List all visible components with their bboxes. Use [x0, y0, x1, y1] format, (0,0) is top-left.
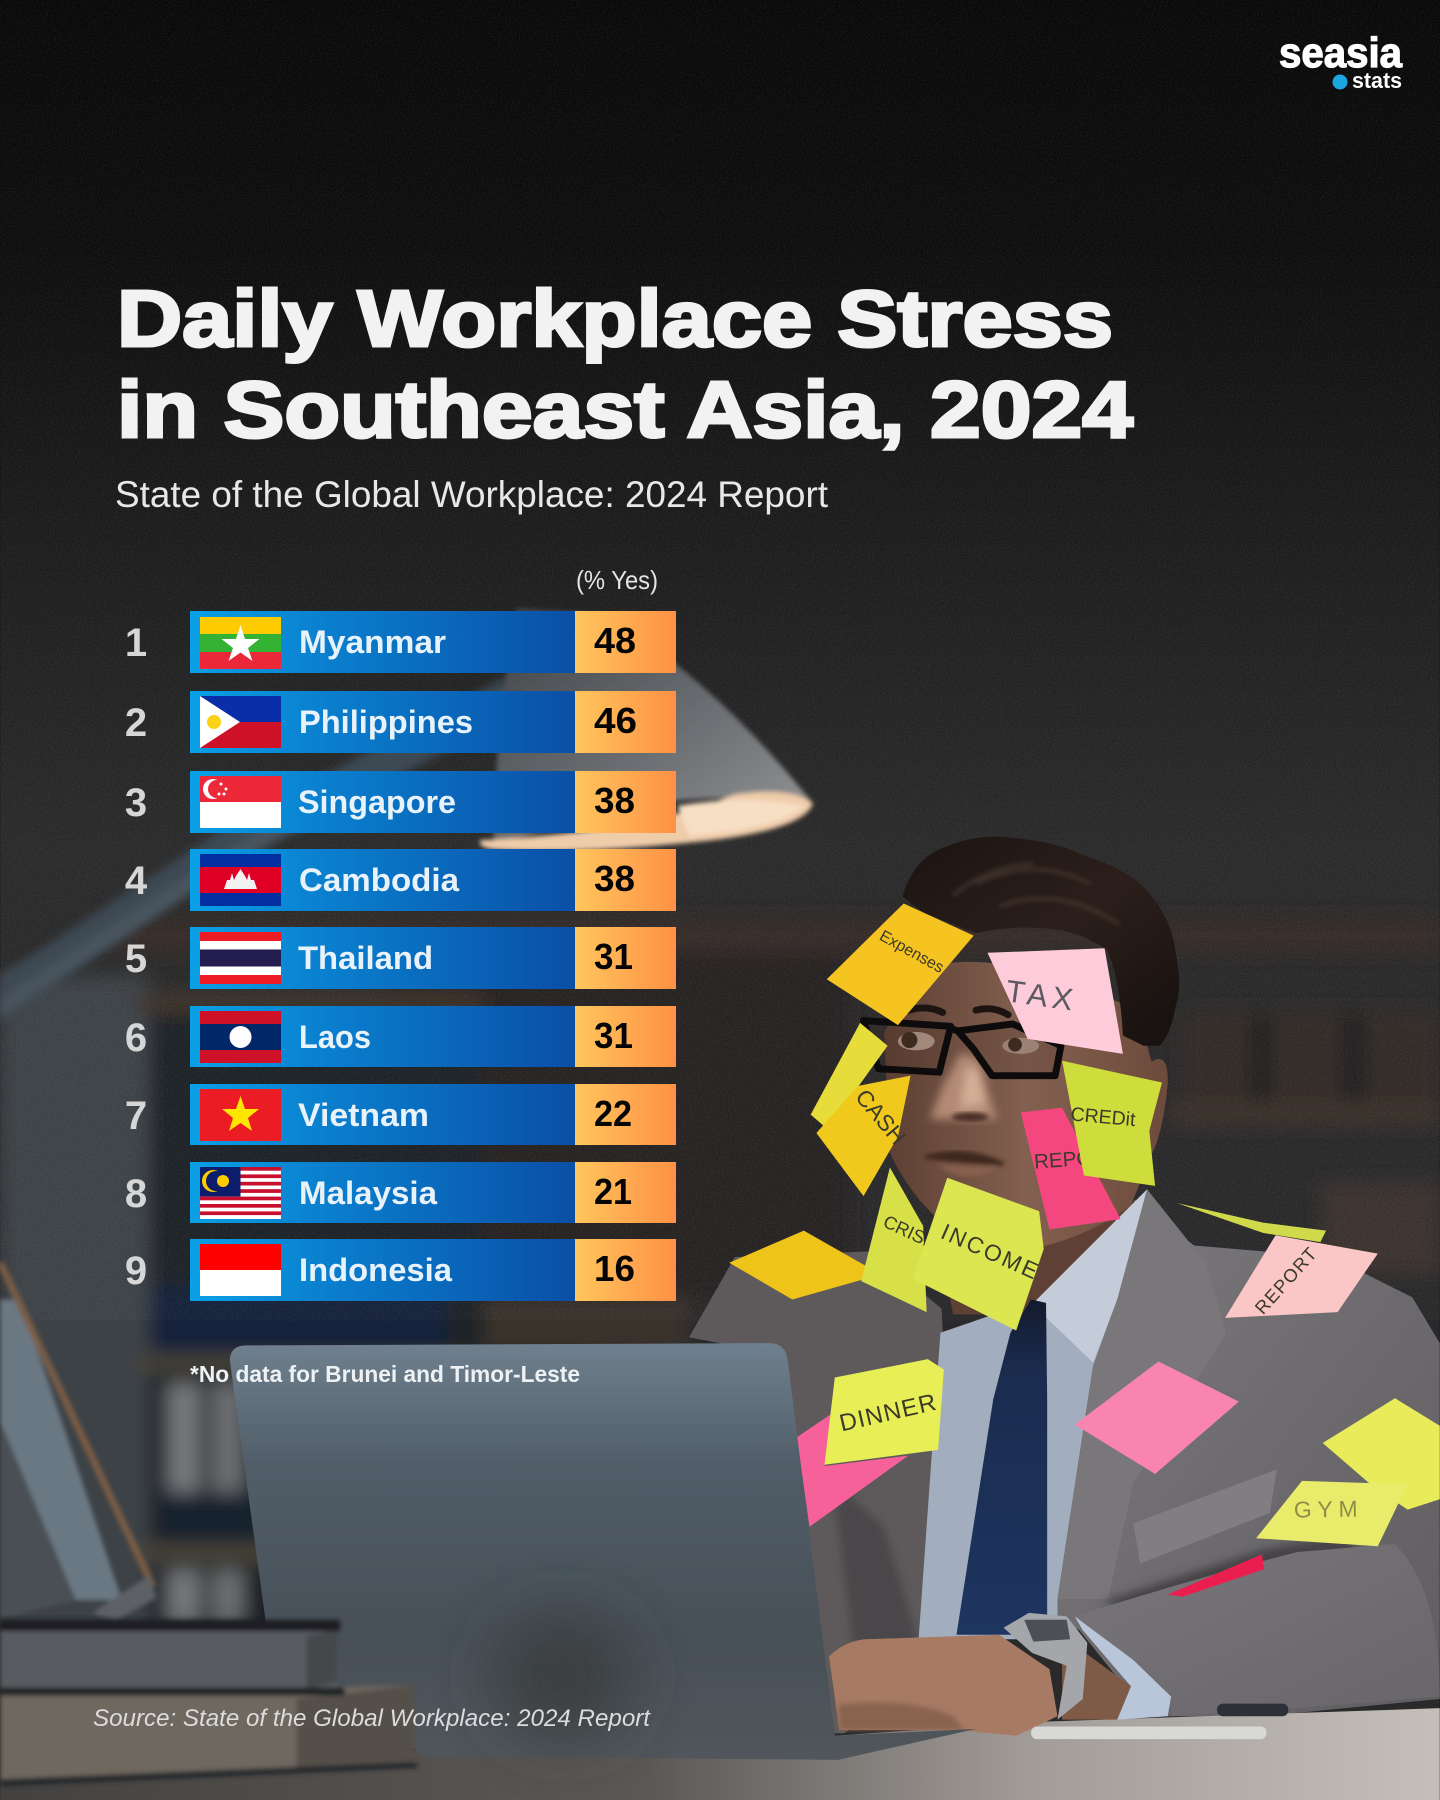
row 3: Singapore: 38 — [594, 780, 635, 821]
row 2: Philippines: 2 — [125, 701, 147, 745]
row 6: Laos: 31 — [594, 1015, 633, 1056]
flag: Malaysia — [200, 1167, 281, 1219]
man: eyebrows — [903, 1008, 1008, 1015]
row 7: Vietnam — [125, 1084, 676, 1145]
sticky note: report pink: REPO — [1033, 1147, 1093, 1174]
row 2: Philippines — [125, 691, 676, 753]
flag: Myanmar — [200, 617, 281, 669]
row 7: Vietnam: Vietnam — [298, 1097, 429, 1133]
flag: Indonesia — [200, 1244, 281, 1296]
man: jacket shadow — [832, 1481, 919, 1665]
source: Source: State of the Global Workplace: 2024 Report — [93, 1705, 651, 1732]
man: hair highlights — [953, 863, 1119, 924]
sticky note: dinner: DINNER — [837, 1389, 940, 1437]
sticky note: crisis: CRISIS — [880, 1211, 945, 1256]
row 3: Singapore: 3 — [125, 781, 147, 825]
row 5: Thailand: Thailand — [298, 940, 433, 976]
man: fingers shadow — [838, 1702, 965, 1730]
pen on desk — [1031, 1727, 1266, 1739]
man: nostrils — [952, 1112, 989, 1122]
man: head — [884, 962, 1168, 1254]
row 6: Laos — [125, 1006, 676, 1067]
row 6: Laos: Laos — [299, 1019, 371, 1055]
man: collar — [1032, 1189, 1147, 1363]
lamp head — [480, 608, 813, 851]
logo: stats — [1352, 68, 1402, 93]
row 9: Indonesia: 16 — [594, 1248, 635, 1289]
sticky note: credit: CREDit — [1070, 1103, 1137, 1131]
row 4: Cambodia: 4 — [125, 859, 148, 903]
blurred bookshelves behind the man — [0, 918, 1440, 1642]
sticky note: thin yellow on shoulder — [1177, 1203, 1326, 1242]
row 9: Indonesia: Indonesia — [299, 1252, 452, 1288]
footnote: *No data for Brunei and Timor-Leste — [190, 1361, 580, 1387]
man: cuff — [1075, 1616, 1171, 1720]
man: tie — [956, 1299, 1047, 1635]
row 8: Malaysia — [125, 1162, 676, 1223]
lamp arm upper — [0, 677, 540, 1022]
sticky note: left yellow — [729, 1231, 870, 1299]
row 8: Malaysia: Malaysia — [299, 1175, 437, 1211]
row 9: Indonesia — [125, 1239, 676, 1301]
man: right jacket — [1058, 1200, 1440, 1716]
man: glasses — [863, 1021, 1061, 1076]
sticky note: cash — [816, 1076, 911, 1196]
title: in Southeast Asia, 2024 — [117, 365, 1134, 454]
sticky note: report: REPORT — [1250, 1242, 1322, 1318]
row 1: Myanmar — [125, 611, 676, 673]
row 2: Philippines: Philippines — [299, 704, 473, 740]
sticky note: crisis — [861, 1167, 945, 1312]
flag: Vietnam — [200, 1089, 281, 1141]
flag: Laos — [200, 1011, 281, 1063]
row 5: Thailand: 5 — [125, 937, 147, 981]
man: left jacket — [689, 1251, 959, 1733]
row 1: Myanmar: 48 — [594, 620, 636, 661]
sticky note: red strip — [1168, 1554, 1264, 1597]
laptop — [230, 1343, 976, 1760]
column header: (% Yes) — [576, 565, 658, 595]
flag: Cambodia — [200, 854, 281, 906]
sticky note: gym — [1256, 1481, 1408, 1546]
sticky note: cash: CASH — [850, 1084, 911, 1149]
man: hand on keyboard — [829, 1635, 1058, 1736]
subtitle: State of the Global Workplace: 2024 Report — [115, 474, 829, 515]
sticky note: yellow on sleeve — [1323, 1398, 1440, 1510]
man: watch — [1004, 1613, 1087, 1720]
row 7: Vietnam: 22 — [594, 1093, 632, 1134]
row 5: Thailand: 31 — [594, 936, 633, 977]
logo: seasia — [1279, 29, 1403, 76]
sticky note: gym: GYM — [1294, 1495, 1364, 1523]
sticky note: income: INCOME — [937, 1218, 1044, 1285]
row 6: Laos: 6 — [125, 1016, 147, 1060]
row 9: Indonesia: 9 — [125, 1249, 147, 1293]
sticky note: pink on chest — [1075, 1361, 1239, 1474]
sticky note: report pink — [1021, 1108, 1121, 1229]
man: mouth — [925, 1153, 1004, 1176]
row 1: Myanmar: Myanmar — [299, 624, 446, 660]
row 1: Myanmar: 1 — [125, 621, 147, 665]
man: sleeve shadow — [1102, 1533, 1355, 1619]
man: lapel — [1058, 1189, 1226, 1599]
sticky note: pink under dinner — [797, 1413, 908, 1527]
flag: Thailand — [200, 932, 281, 984]
sticky note: yellow behind cash — [811, 1023, 888, 1128]
man: wrist — [1062, 1636, 1131, 1720]
row 8: Malaysia: 21 — [594, 1171, 632, 1212]
title — [117, 274, 1134, 454]
row 5: Thailand — [125, 927, 676, 989]
sticky note: tax — [987, 948, 1123, 1054]
man: shirt — [919, 1299, 1117, 1639]
sticky note: tax: TAX — [1004, 973, 1080, 1018]
row 4: Cambodia — [125, 849, 676, 911]
flag: Singapore — [200, 776, 281, 828]
row 2: Philippines: 46 — [594, 700, 637, 741]
row 3: Singapore — [125, 771, 676, 833]
desk — [0, 1708, 1440, 1800]
sticky note: expenses — [827, 903, 974, 1025]
sticky note: dinner — [824, 1359, 944, 1465]
stack of books — [0, 1620, 418, 1786]
man: eyes — [898, 1032, 1039, 1054]
man: neck — [936, 1171, 1137, 1314]
man: hair — [903, 837, 1179, 1046]
row 4: Cambodia: Cambodia — [299, 862, 459, 898]
man: jacket pocket — [1133, 1469, 1277, 1564]
lamp lower arm and notebook — [0, 1263, 156, 1621]
man: sleeve buttons — [1217, 1704, 1288, 1716]
row 4: Cambodia: 38 — [594, 858, 635, 899]
row 8: Malaysia: 8 — [125, 1172, 147, 1216]
man: nose highlight — [930, 1053, 997, 1119]
flag: Philippines — [200, 696, 281, 748]
sticky note: income — [913, 1178, 1044, 1330]
sticky note: credit — [1062, 1061, 1162, 1186]
film grain on wall — [0, 0, 1440, 1320]
sticky note: expenses: Expenses — [876, 927, 947, 977]
man: sleeve — [1075, 1544, 1440, 1716]
title: Daily Workplace Stress — [117, 274, 1113, 363]
row 3: Singapore: Singapore — [298, 784, 456, 820]
sticky note: report — [1225, 1235, 1378, 1318]
row 7: Vietnam: 7 — [125, 1094, 147, 1138]
